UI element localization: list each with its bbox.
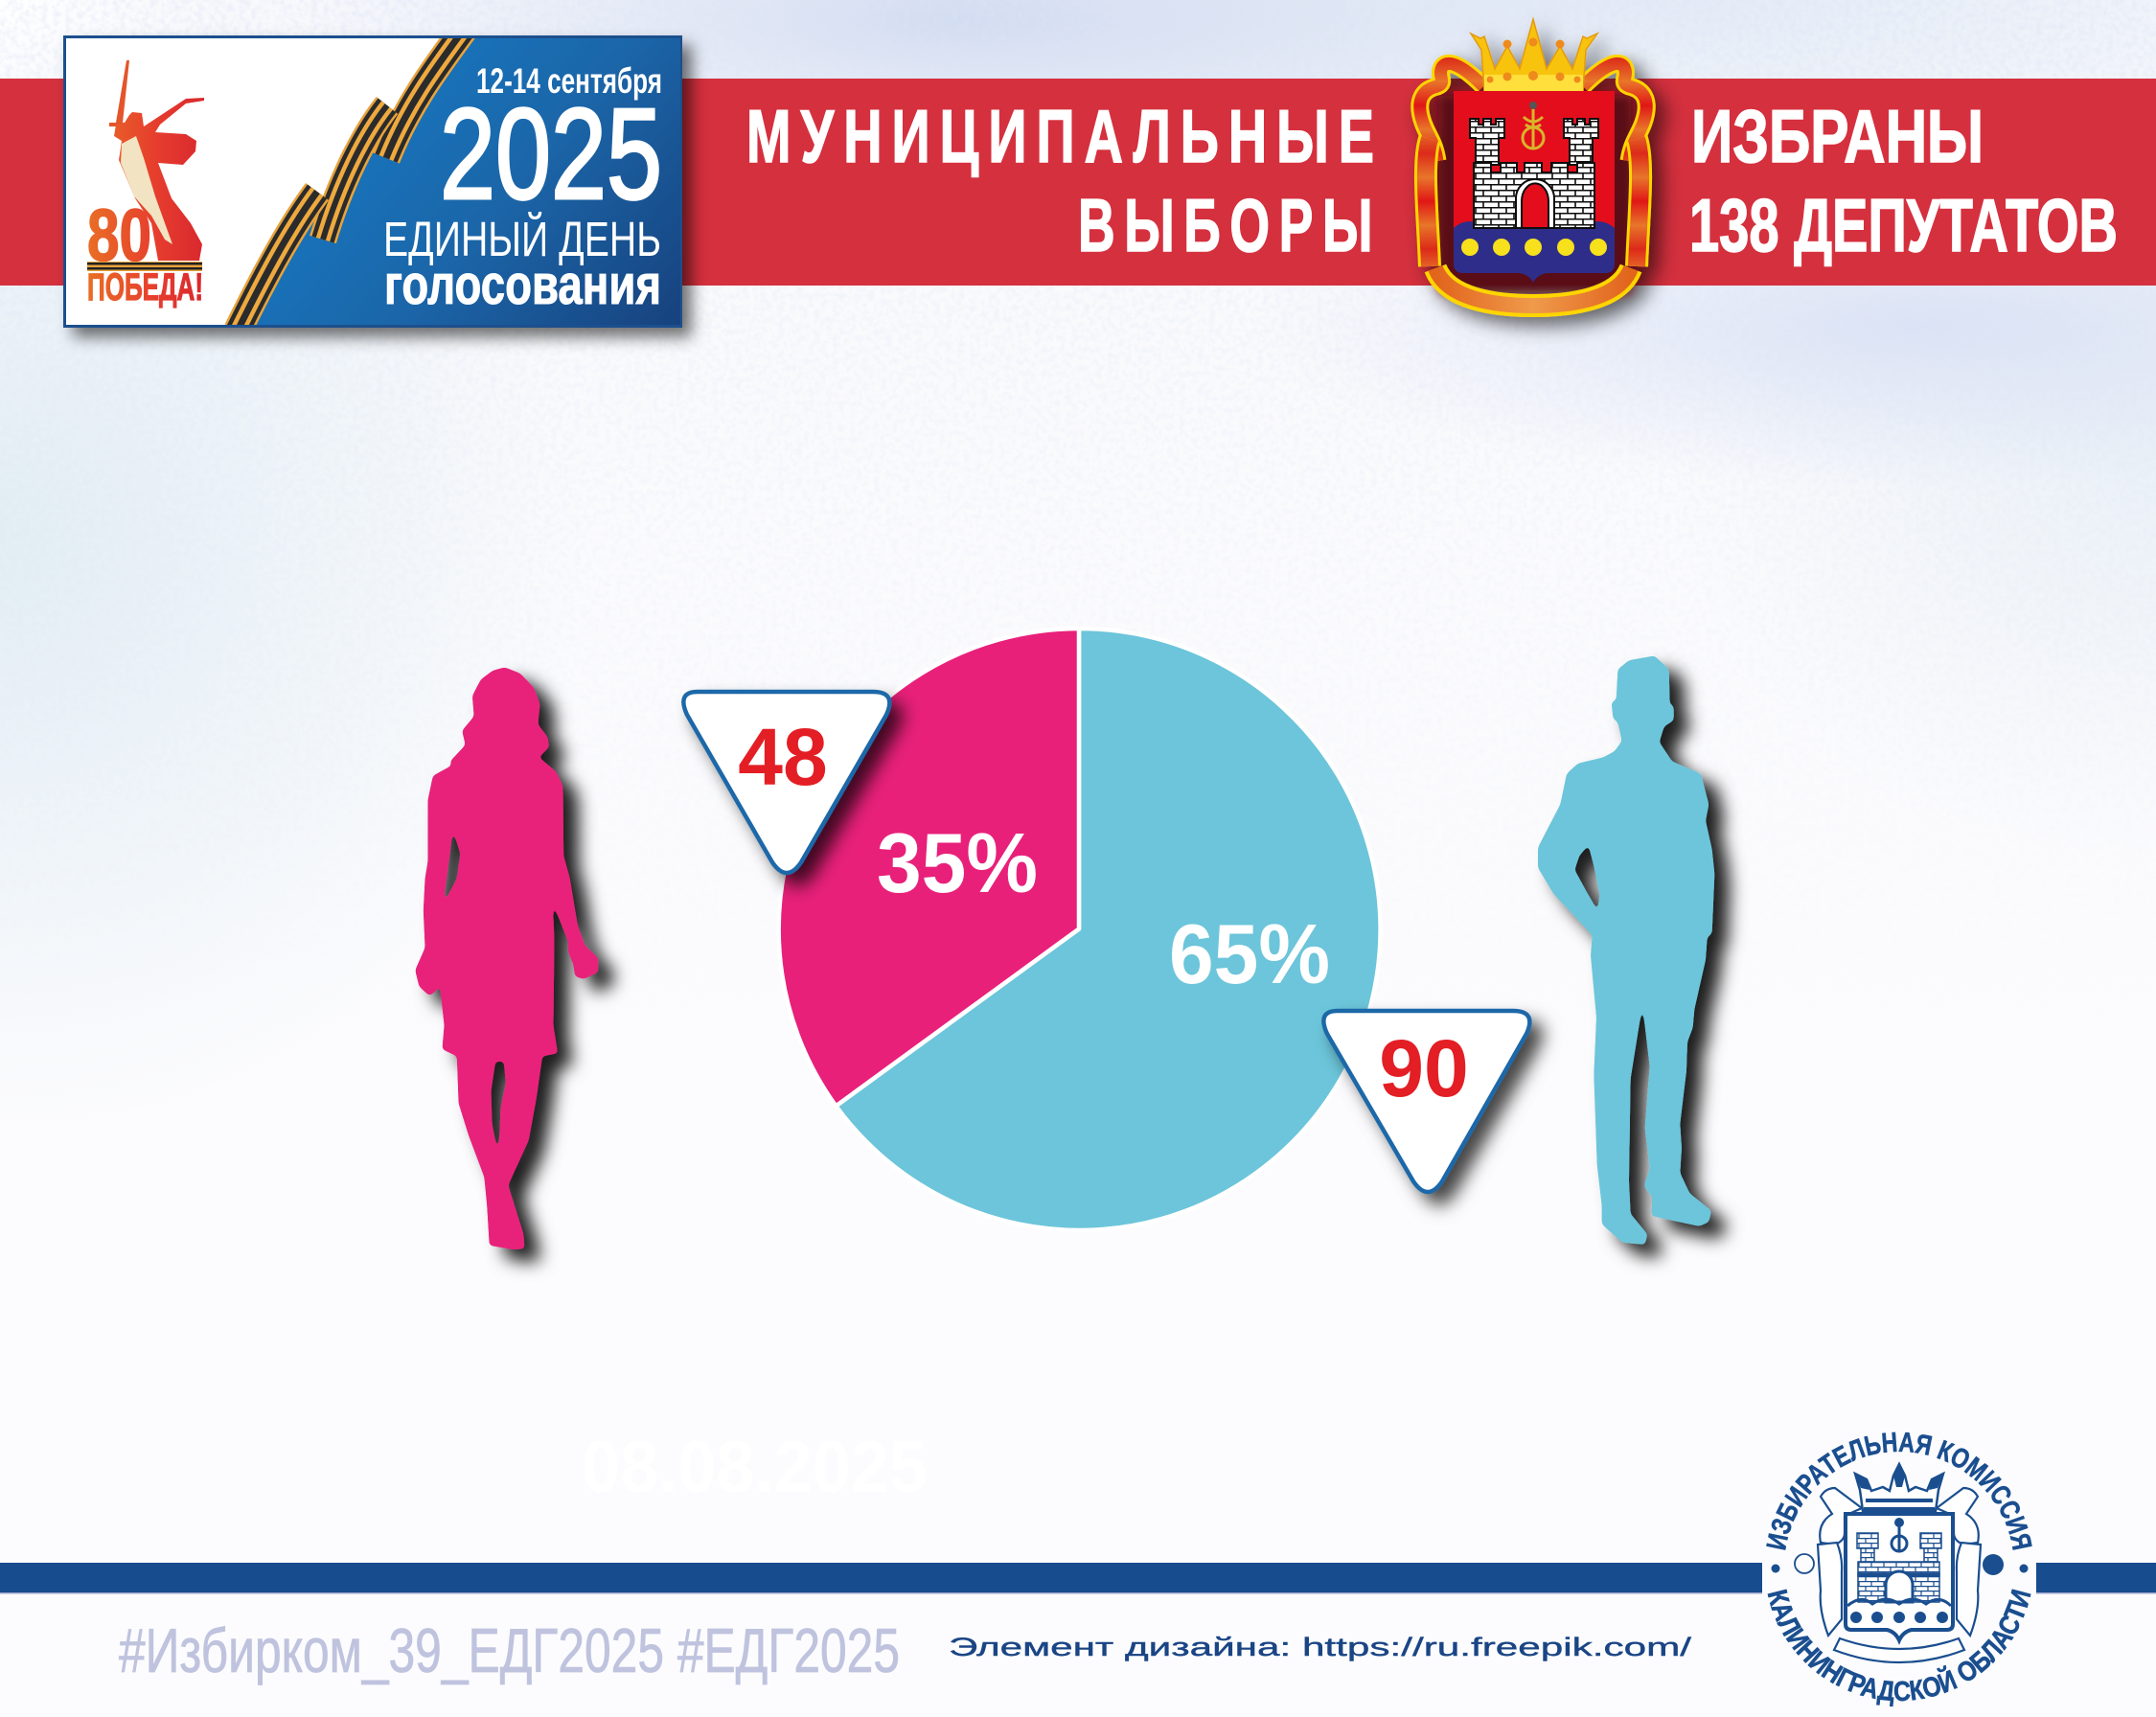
icon: ribbon stripe <box>87 262 202 271</box>
label: 35 percent: 35% <box>877 815 1038 910</box>
background texture <box>0 0 2146 391</box>
heading: municipal elections <box>746 94 1384 267</box>
callout: 48 women <box>683 692 889 873</box>
castle <box>1470 119 1598 228</box>
icon: female silhouette <box>415 667 598 1249</box>
heading: municipal elections: МУНИЦИПАЛЬНЫЕ <box>746 94 1384 178</box>
seal shield <box>1846 1514 1953 1640</box>
dark backing <box>1439 96 1631 292</box>
seal text: ИЗБИРАТЕЛЬНАЯ КОМИССИЯ <box>1766 1431 2032 1550</box>
card text: ЕДИНЫЙ ДЕНЬ <box>383 211 661 266</box>
label: 65 percent: 65% <box>1169 906 1330 1001</box>
callout: 90 men: 90 <box>1379 1023 1469 1113</box>
seal castle <box>1857 1533 1941 1602</box>
design credit: Элемент дизайна: https://ru.freepik.com/ <box>949 1633 1692 1661</box>
slice: men 65% <box>836 629 1381 1230</box>
card text: голосования <box>384 254 661 316</box>
icon: St George ribbon <box>238 27 466 331</box>
mantling <box>1420 63 1646 306</box>
card text: 2025 <box>440 81 662 226</box>
seal water <box>1847 1599 1951 1623</box>
ghost date text: 08.08.2025 <box>582 1427 928 1508</box>
heading: municipal elections: ВЫБОРЫ <box>1078 183 1382 267</box>
heading: elected deputies <box>1689 94 2118 267</box>
seal mantling <box>1818 1488 1981 1662</box>
label: 80: 80 <box>87 195 151 277</box>
icon: Kaliningrad region coat of arms <box>1420 19 1646 306</box>
blue footer band <box>0 1563 2156 1594</box>
seal monogram <box>1892 1520 1907 1551</box>
card text: 12-14 сентября <box>476 61 662 101</box>
seal text <box>1766 1431 2032 1707</box>
seal dots <box>1771 1554 2028 1575</box>
seal crown <box>1855 1464 1943 1511</box>
icon: male silhouette <box>1538 655 1714 1245</box>
monogram <box>1523 102 1544 149</box>
callout: 48 women: 48 <box>738 712 828 802</box>
seal text: КАЛИНИНГРАДСКОЙ ОБЛАСТИ <box>1767 1589 2031 1707</box>
slice: women 35% <box>779 629 1079 1106</box>
icon: Motherland statue <box>109 60 204 261</box>
card text <box>383 61 662 316</box>
shield <box>1454 91 1615 283</box>
election day card <box>65 27 680 331</box>
blue panel <box>241 38 680 325</box>
crown <box>1471 19 1597 91</box>
hashtags: #Избирком_39_ЕДГ2025 #ЕДГ2025 <box>119 1615 900 1685</box>
red header band <box>0 79 2156 286</box>
label: victory: ПОБЕДА! <box>87 266 203 309</box>
pie chart <box>779 629 1381 1230</box>
seal: election commission <box>1766 1431 2032 1707</box>
callout: 90 men <box>1323 1011 1529 1192</box>
heading: elected deputies: ИЗБРАНЫ <box>1691 94 1984 178</box>
